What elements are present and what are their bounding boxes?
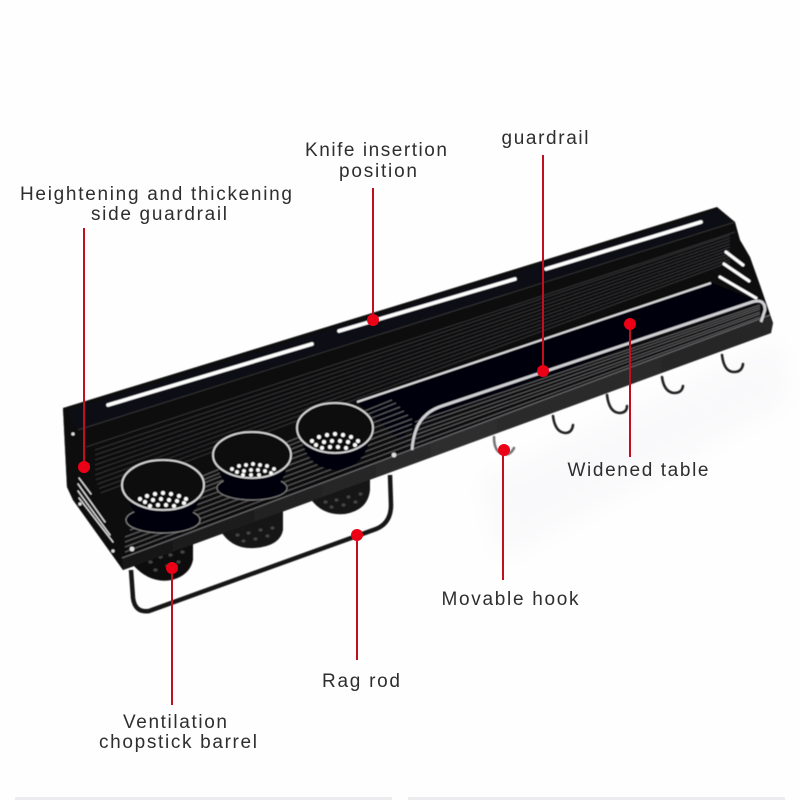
lip highlight (122, 315, 770, 558)
label: ventilation chopstick barrel: chopstick barrel (99, 732, 257, 753)
label: movable hook: Movable hook (442, 589, 579, 610)
soft shadow (480, 340, 790, 560)
barrel 3 (297, 403, 373, 470)
product: wall-mounted kitchen shelf (63, 207, 773, 611)
label: knife insertion position: position (339, 161, 417, 182)
label: rag rod: Rag rod (322, 671, 400, 692)
guardrail (412, 301, 765, 450)
icon: rag rod (131, 475, 391, 611)
back wall ribs (78, 222, 735, 495)
shelf body (63, 207, 773, 570)
callout line: chopstick barrel (166, 562, 178, 705)
icon: hooks (494, 355, 743, 454)
label: ventilation chopstick barrel: Ventilation (123, 712, 227, 733)
label: widened table: Widened table (568, 460, 708, 481)
label: heightening side guardrail: Heightening and thickening (20, 184, 292, 205)
callout line: knife insertion (367, 188, 379, 326)
label: knife insertion position (305, 140, 447, 182)
callout line: widened table (624, 318, 636, 457)
bottom edge strips (15, 797, 785, 800)
barrel 1 (122, 460, 204, 533)
callout line: side guardrail (78, 228, 90, 473)
left vent slots (78, 478, 113, 542)
label: heightening side guardrail (20, 184, 292, 225)
front ribs (125, 305, 760, 552)
bright line (357, 283, 711, 402)
left side panel (63, 408, 123, 570)
right vent slots (720, 252, 756, 298)
screws (71, 432, 396, 553)
label: heightening side guardrail: side guardrail (91, 204, 227, 225)
top flange (68, 210, 733, 430)
label: knife insertion position: Knife insertion (305, 140, 447, 161)
callout line: movable hook (498, 444, 510, 580)
knife insertion slots (108, 222, 701, 405)
label: guardrail: guardrail (502, 128, 588, 149)
dark floor band (357, 283, 755, 440)
icon: barrel bottoms (133, 478, 370, 581)
front lip (122, 315, 773, 570)
callout line: rag rod (351, 529, 363, 660)
barrel 2 (213, 432, 291, 500)
label: ventilation chopstick barrel (99, 712, 257, 753)
callout line: guardrail (537, 155, 549, 377)
